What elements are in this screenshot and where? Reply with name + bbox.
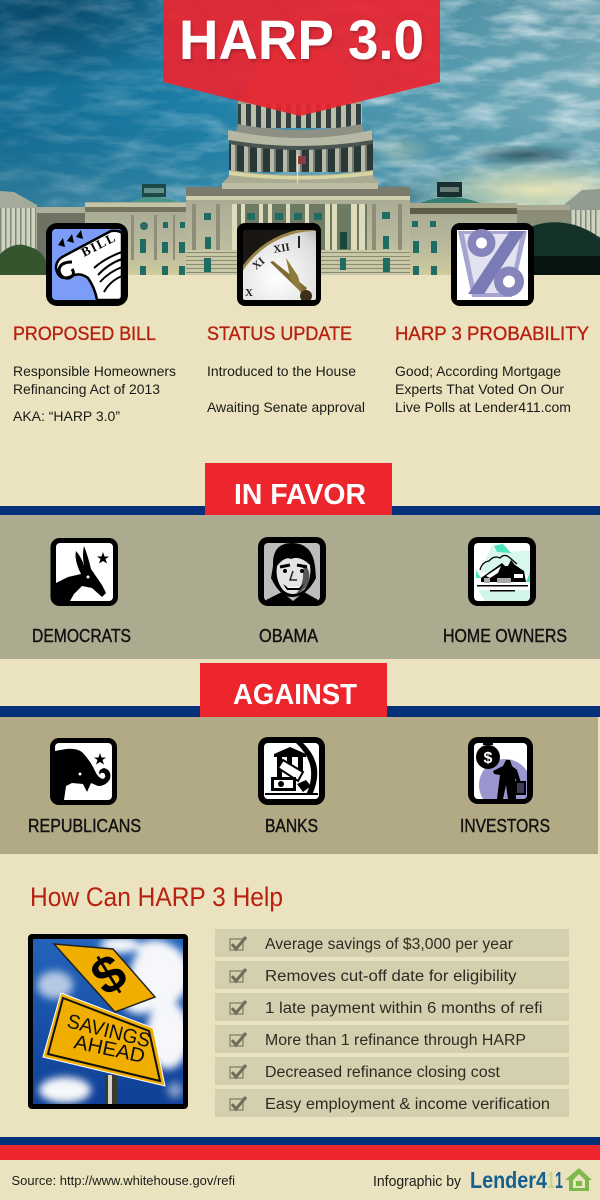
logo: lender411: 1: [555, 1167, 563, 1193]
text: probability details: Live Polls at Lender411.com: [395, 399, 571, 415]
text: status details: Awaiting Senate approval: [207, 399, 365, 415]
logo: lender411: 1: [547, 1167, 555, 1193]
heading: against: [200, 663, 387, 717]
heading: against: AGAINST: [233, 679, 357, 711]
far wings: [0, 191, 37, 254]
icon: banks: [258, 737, 325, 805]
photo: savings ahead sign: [28, 934, 190, 1109]
panel: in favor: [0, 463, 600, 659]
panel: status update: [207, 324, 365, 415]
central block: [186, 200, 410, 250]
source: Source: http://www.whitehouse.gov/refi: [12, 1174, 235, 1188]
footer stripes: [0, 1137, 600, 1160]
left wing: [130, 197, 177, 202]
icon: bill: [46, 223, 128, 306]
heading: in favor: IN FAVOR: [234, 479, 366, 511]
icon: clock: X: [245, 287, 253, 299]
label: investors: INVESTORS: [460, 816, 550, 836]
credit: Infographic by: [373, 1174, 462, 1190]
panel: against: [0, 663, 600, 854]
icon: clock: [237, 223, 321, 306]
icon: democrat donkey: [50, 538, 118, 606]
item: closing cost: Decreased refinance closing cost: [265, 1064, 501, 1081]
item: cut-off date: Removes cut-off date for eligibility: [265, 968, 517, 985]
item: average savings: [215, 929, 569, 957]
text: proposed bill details: AKA: “HARP 3.0”: [13, 408, 120, 424]
title banner: [163, 0, 440, 116]
text: proposed bill details: Responsible Homeowners: [13, 363, 176, 379]
text: proposed bill details: [13, 363, 176, 424]
icon: clock: XII: [272, 241, 291, 256]
item: more than one refinance: [215, 1025, 569, 1053]
trees: [0, 245, 46, 275]
text: probability details: Good; According Mortgage: [395, 363, 561, 379]
text: probability details: Experts That Voted On Our: [395, 381, 564, 397]
heading: in favor: [205, 463, 392, 515]
icon: investors: [468, 737, 533, 811]
heading: probability: HARP 3 PROBABILITY: [395, 324, 589, 345]
photo: savings ahead sign: SAVINGS: [65, 1011, 153, 1052]
icon: percent: [451, 223, 534, 306]
heading: proposed bill: PROPOSED BILL: [13, 324, 156, 345]
logo: lender411: Lender4: [470, 1167, 547, 1193]
item: closing cost: [215, 1057, 569, 1085]
flag: [297, 155, 298, 185]
panel: harp 3 probability: [395, 324, 589, 415]
text: proposed bill details: Refinancing Act of 2013: [13, 381, 160, 397]
text: probability details: [395, 363, 571, 415]
panel: proposed bill: [13, 324, 176, 424]
item: more than one refinance: More than 1 refinance through HARP: [265, 1032, 526, 1049]
right wing: [420, 197, 480, 203]
heading: status update: STATUS UPDATE: [207, 324, 352, 345]
hero photo: Capitol building: [0, 0, 600, 275]
label: home owners: HOME OWNERS: [443, 626, 567, 646]
dome: [246, 40, 354, 108]
label: republicans: REPUBLICANS: [28, 816, 141, 836]
text: status details: Introduced to the House: [207, 363, 356, 379]
item: average savings: Average savings of $3,000 per year: [265, 936, 513, 953]
item: employment verification: [215, 1089, 569, 1117]
icon: obama: [258, 537, 326, 606]
heading: how can harp 3 help: How Can HARP 3 Help: [30, 882, 283, 912]
icon: home owners: [468, 537, 536, 606]
title: HARP 3.0: [179, 8, 424, 71]
text: status details: [207, 363, 365, 415]
icon: republican elephant: [50, 738, 117, 805]
item: late payment: 1 late payment within 6 months of refi: [265, 1000, 542, 1017]
label: banks: BANKS: [265, 816, 318, 836]
photo: savings ahead sign: AHEAD: [72, 1031, 147, 1068]
item: cut-off date: [215, 961, 569, 989]
icon: bill: BILL: [79, 230, 118, 260]
checklist: [215, 929, 569, 1117]
icon: investors: $: [484, 750, 493, 767]
label: obama: OBAMA: [259, 626, 318, 646]
item: employment verification: Easy employment & income verification: [265, 1096, 550, 1113]
label: democrats: DEMOCRATS: [32, 626, 131, 646]
item: late payment: [215, 993, 569, 1021]
photo: savings ahead sign: $: [81, 943, 137, 1007]
icon: clock: XI: [250, 255, 267, 272]
